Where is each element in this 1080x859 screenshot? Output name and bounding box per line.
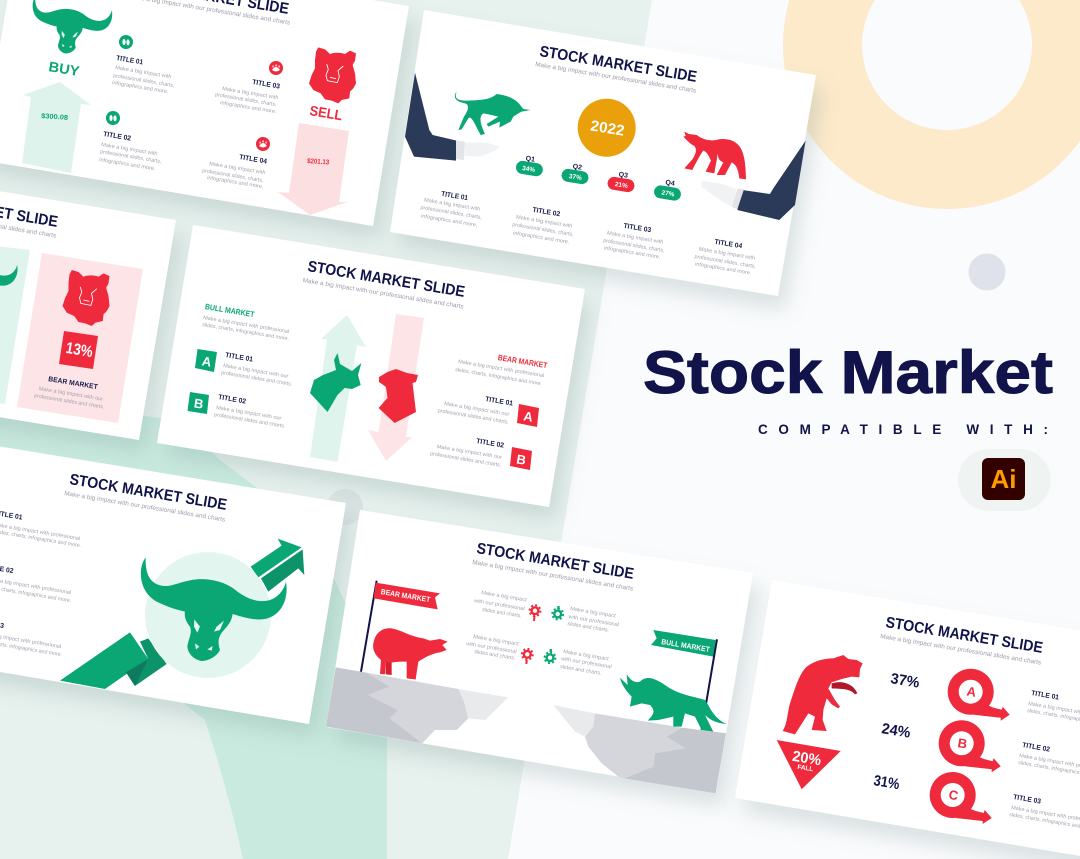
icon: bear head bbox=[309, 47, 356, 103]
bull market column: A bbox=[201, 353, 213, 370]
bull items: professional slides, charts, bbox=[100, 149, 162, 165]
slide 2 captions: TITLE 04 bbox=[714, 239, 743, 250]
slide 7 captions: TITLE 02 bbox=[1022, 742, 1051, 754]
bear market column: professional slides and charts. bbox=[430, 451, 502, 469]
green bull bbox=[455, 92, 531, 135]
slide 1: buy and sell bbox=[0, 0, 409, 226]
slide 7 captions: TITLE 01 bbox=[1031, 690, 1060, 702]
slide 2 captions: Make a big impact with bbox=[607, 230, 664, 246]
slide 2 captions: professional slides, charts, bbox=[420, 205, 482, 221]
decorative circle behind slides bbox=[327, 489, 363, 525]
slide 2 captions: Make a big impact with bbox=[424, 197, 481, 213]
gear captions: slides and charts. bbox=[560, 664, 602, 677]
gear captions: Make a big impact bbox=[570, 606, 617, 620]
buy label: BUY bbox=[48, 58, 81, 79]
bull items bbox=[99, 35, 175, 172]
gear captions: Make a big impact bbox=[563, 649, 610, 663]
slide 7: bear fall with percentages bbox=[735, 580, 1080, 859]
quarter pills: 37% bbox=[568, 173, 582, 182]
bear items: TITLE 03 bbox=[252, 79, 281, 91]
left cliff bbox=[326, 667, 508, 743]
gear captions: slides and charts. bbox=[567, 621, 609, 634]
slide 4: bull vs bear arrows: STOCK MARKET SLIDE bbox=[306, 258, 466, 301]
gear captions bbox=[466, 590, 619, 677]
gear captions: with our professional bbox=[561, 656, 612, 670]
bear market column: professional slides and charts. bbox=[437, 408, 509, 426]
bull items: TITLE 01 bbox=[116, 55, 144, 66]
sell label: SELL bbox=[309, 102, 344, 123]
bear market column bbox=[430, 353, 548, 470]
gear captions: Make a big impact bbox=[473, 634, 520, 648]
slide 7 captions bbox=[1009, 690, 1080, 832]
bear market text: BEAR MARKET bbox=[48, 376, 99, 391]
gear captions: with our professional bbox=[568, 614, 619, 628]
standing bear bbox=[783, 655, 863, 734]
flag labels: BEAR MARKET bbox=[380, 587, 431, 604]
right flag bbox=[651, 630, 717, 730]
bull market column bbox=[188, 302, 293, 430]
slide 2 captions: Make a big impact with bbox=[698, 246, 756, 262]
down arrow bbox=[278, 123, 349, 215]
illustration group bbox=[405, 73, 806, 220]
bull items: infographics and more. bbox=[112, 80, 169, 95]
slide 2 captions: professional slides, charts, bbox=[512, 222, 574, 238]
bear market column: Make a big impact with our bbox=[444, 401, 510, 418]
slide 2 captions: TITLE 01 bbox=[441, 191, 469, 202]
bull items: Make a big impact with bbox=[115, 65, 172, 80]
slide 5: bull with rising arrow: STOCK MARKET SLIDE bbox=[68, 471, 228, 514]
bear items: professional slides, charts, bbox=[215, 92, 277, 108]
bear market column: TITLE 02 bbox=[476, 438, 505, 450]
icon: Adobe Illustrator badge: Ai bbox=[990, 464, 1016, 494]
bull market column: professional slides and charts. bbox=[214, 412, 286, 430]
bull items: professional slides, charts, bbox=[113, 73, 175, 89]
quarter pills: Q4 bbox=[665, 179, 675, 188]
bull market column: Make a big impact with professional bbox=[203, 315, 289, 335]
quarter pills: Q3 bbox=[618, 171, 629, 180]
right cliff bbox=[553, 705, 726, 793]
bear items bbox=[202, 61, 283, 190]
quarter pills: Q1 bbox=[525, 155, 536, 164]
slide 5: bull with rising arrow: Make a big impact with our professional slides and charts bbox=[64, 490, 226, 524]
bear items: professional slides, charts, bbox=[202, 168, 264, 184]
bull items: TITLE 02 bbox=[103, 131, 132, 143]
slide 6: bear and bull on cliffs bbox=[326, 510, 753, 793]
percentages bbox=[872, 670, 921, 793]
slide 2: quarters 2022 bbox=[390, 10, 816, 296]
circular arrow B: B bbox=[957, 735, 968, 752]
slide 4: bull vs bear arrows bbox=[157, 225, 585, 507]
slide 2 captions: Make a big impact with bbox=[516, 214, 573, 230]
icon: bull head bbox=[141, 558, 287, 661]
gear captions: with our professional bbox=[474, 598, 525, 612]
bear items: Make a big impact with bbox=[222, 86, 279, 101]
bear items: TITLE 04 bbox=[239, 154, 268, 166]
quarter pills: 27% bbox=[661, 190, 675, 199]
gear icons bbox=[522, 605, 563, 664]
bear market text: professional slides and charts. bbox=[34, 393, 105, 411]
left arm bbox=[405, 73, 500, 161]
flag labels: BULL MARKET bbox=[661, 637, 711, 654]
slide 5: bull with rising arrow bbox=[0, 439, 346, 724]
bull market column: professional slides and charts. bbox=[221, 370, 293, 388]
slide 2 captions: infographics and more. bbox=[421, 213, 478, 229]
slide 6: bear and bull on cliffs: Make a big impact with our professional slides and charts bbox=[472, 559, 634, 593]
circular arrow A: A bbox=[966, 684, 978, 700]
bull market column: B bbox=[193, 395, 205, 412]
up arrow bbox=[22, 82, 91, 173]
2022 circle bbox=[578, 99, 636, 157]
bear market column: Make a big impact with our bbox=[436, 444, 502, 461]
slide 3: bull and bear panels bbox=[0, 156, 176, 440]
icon: green bull bbox=[310, 353, 361, 412]
bull market column: Make a big impact with our bbox=[223, 363, 289, 380]
slide 4: bull vs bear arrows: Make a big impact with our professional slides and charts bbox=[302, 277, 464, 311]
up arrow bbox=[310, 315, 366, 462]
decorative grey circle bbox=[968, 254, 1006, 290]
quarter pills: Q2 bbox=[572, 163, 583, 172]
rising arrow bbox=[60, 539, 304, 689]
bear market column: Make a big impact with professional bbox=[458, 359, 544, 379]
gear captions: slides and charts. bbox=[482, 607, 522, 620]
bear market text: Make a big impact with our bbox=[38, 386, 104, 403]
slide 2 captions: professional slides, charts, bbox=[694, 254, 756, 270]
bear market column: TITLE 01 bbox=[485, 396, 514, 408]
bull market column: TITLE 01 bbox=[225, 352, 254, 364]
background panel bbox=[0, 0, 652, 859]
red bear bbox=[683, 132, 746, 179]
circular arrow B bbox=[939, 720, 1001, 772]
20% fall triangle bbox=[777, 740, 841, 789]
percentages: 37% bbox=[889, 670, 921, 692]
slide 2: quarters 2022: STOCK MARKET SLIDE bbox=[538, 43, 698, 86]
bull horn bbox=[0, 252, 18, 308]
down arrow bbox=[368, 314, 424, 461]
slide 2: quarters 2022: Make a big impact with our professional slides and charts bbox=[535, 61, 697, 95]
13% badge: 13% bbox=[65, 340, 94, 361]
icon: red bear bbox=[379, 369, 418, 423]
circular arrow C bbox=[930, 772, 992, 824]
icon: bull head bbox=[33, 0, 112, 54]
icon: Adobe Illustrator badge bbox=[958, 449, 1051, 511]
bear items: infographics and more. bbox=[220, 100, 277, 115]
quarter pills bbox=[515, 155, 682, 202]
price up: $300.08 bbox=[41, 113, 68, 122]
slide 7 captions: TITLE 03 bbox=[1013, 794, 1042, 806]
slide 2 captions: TITLE 03 bbox=[623, 223, 652, 234]
bear market column: B bbox=[515, 451, 527, 468]
slide 2 captions: infographics and more. bbox=[513, 230, 570, 246]
slide 7: bear fall with percentages: STOCK MARKET SLIDE bbox=[884, 614, 1044, 657]
left flag bbox=[361, 581, 440, 672]
bear items: Make a big impact with bbox=[209, 161, 266, 176]
quarter pills: 21% bbox=[614, 181, 628, 190]
circular arrow C: C bbox=[948, 787, 960, 803]
decorative peach ring bbox=[822, 0, 1072, 170]
percentages: 31% bbox=[872, 772, 901, 793]
bull market column: Make a big impact with our bbox=[216, 405, 282, 422]
flag labels bbox=[380, 587, 711, 654]
13% badge bbox=[59, 331, 98, 369]
slide 2 captions: infographics and more. bbox=[604, 245, 661, 261]
bull market column: TITLE 02 bbox=[218, 394, 247, 406]
slide 2 captions bbox=[420, 191, 756, 277]
main title: Stock Market bbox=[643, 339, 1053, 406]
bull items: infographics and more. bbox=[99, 157, 156, 172]
red bear bbox=[373, 628, 448, 679]
slide 6: bear and bull on cliffs: STOCK MARKET SLIDE bbox=[475, 540, 635, 583]
right arm bbox=[702, 141, 806, 220]
price down: $201.13 bbox=[307, 158, 329, 167]
bear market column: slides, charts, infographics and more. bbox=[455, 367, 542, 387]
2022 circle: 2022 bbox=[589, 117, 626, 140]
bull panel bbox=[0, 237, 30, 404]
bear panel bbox=[17, 253, 143, 423]
text list bbox=[0, 510, 81, 658]
background mint shape bbox=[0, 400, 387, 859]
bull items: Make a big impact with bbox=[101, 142, 158, 157]
percentages: 24% bbox=[880, 720, 912, 742]
slide 2 captions: TITLE 02 bbox=[532, 207, 561, 218]
slide 2 captions: infographics and more. bbox=[695, 261, 752, 277]
circular arrow A bbox=[948, 669, 1010, 721]
bear market column: BEAR MARKET bbox=[497, 353, 548, 370]
icon: bear head bbox=[62, 270, 109, 326]
20% fall triangle: 20% bbox=[791, 748, 822, 769]
gear captions: with our professional bbox=[466, 641, 517, 655]
gear captions: Make a big impact bbox=[481, 590, 528, 604]
green bull bbox=[620, 674, 727, 732]
slide 2 captions: professional slides, charts, bbox=[603, 238, 665, 254]
slide 7: bear fall with percentages: Make a big impact with our professional slides and charts bbox=[880, 633, 1042, 667]
bear market column: A bbox=[522, 408, 535, 425]
compatible with label: COMPATIBLE WITH: bbox=[758, 422, 1048, 437]
scene artwork bbox=[326, 581, 727, 793]
quarter pills: 34% bbox=[522, 165, 536, 174]
20% fall triangle: FALL bbox=[797, 764, 814, 773]
bear items: infographics and more. bbox=[207, 175, 264, 190]
bull market column: slides, charts, infographics and more. bbox=[202, 322, 289, 342]
mint circle bbox=[145, 552, 271, 678]
bull market column: BULL MARKET bbox=[204, 302, 255, 319]
bear market text bbox=[34, 376, 105, 411]
gear captions: slides and charts. bbox=[474, 649, 516, 662]
